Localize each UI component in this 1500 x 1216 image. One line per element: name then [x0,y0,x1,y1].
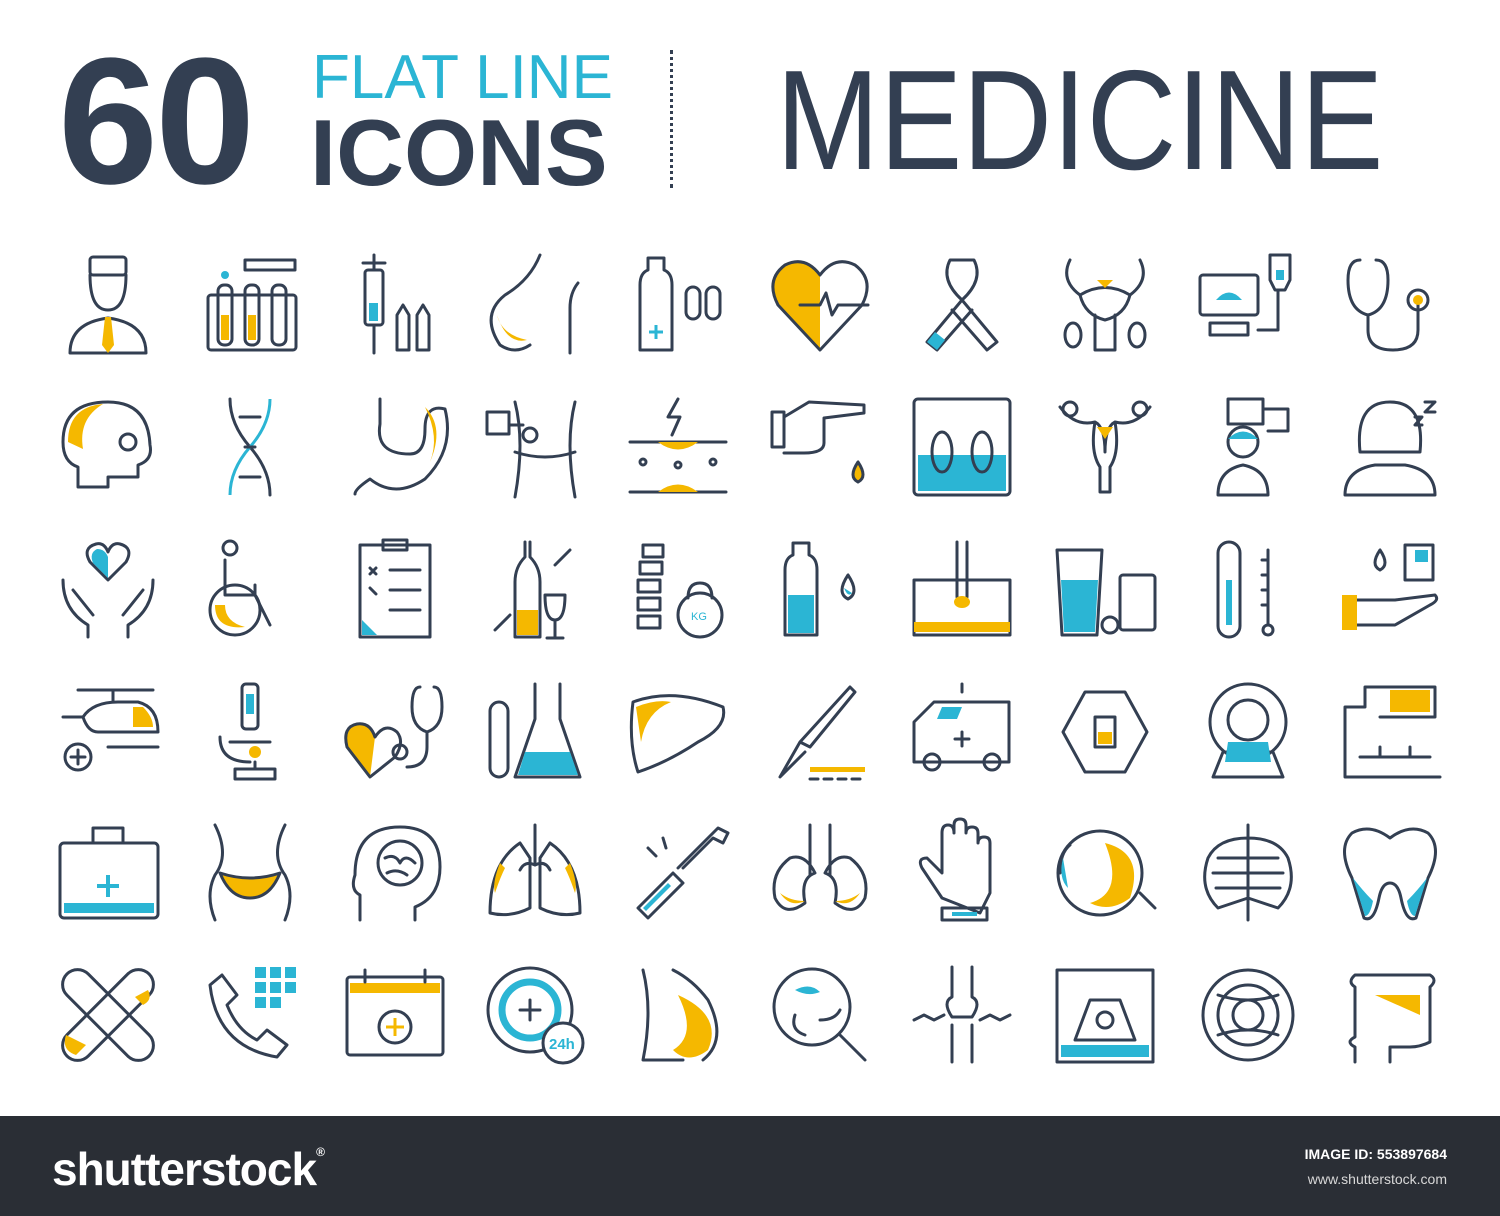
icon: ribcage [1205,825,1291,920]
icon: bottle pills [640,258,720,350]
icon: kidneys [774,825,866,909]
icon: ultrasound image [1057,970,1153,1062]
icon: breast [491,255,578,353]
icon: bandage [56,963,160,1067]
icon: dna [230,399,270,495]
icon: ribbon [927,260,997,350]
icon: 24h: 24h [549,1036,575,1053]
icon: knee joint [914,967,1010,1062]
icon: doctor [70,257,146,353]
icon: skin lightning [630,399,726,492]
icon: skull [63,402,150,487]
icon: wine [495,542,570,638]
icon: clipboard [360,540,430,637]
icon: heart stethoscope [346,687,442,777]
icon: colon [1350,975,1434,1062]
icon: belly [643,970,717,1060]
icon: ultrasound [1200,255,1290,335]
icon: molecule [1063,692,1147,772]
icon: thermometer [1218,542,1273,637]
icon: hands heart [63,544,153,637]
icon: head brain [353,827,440,920]
icon: stethoscope [1348,260,1428,350]
icon: hand drop IV [1342,545,1437,630]
icon: mri [1210,684,1286,777]
icon: test tubes [208,260,296,350]
icon: male organs [1065,260,1145,350]
icon: microscope [220,684,275,779]
dotted divider [670,50,673,188]
icon: eye [1058,831,1155,915]
icon: magnifier bacteria [774,969,865,1060]
icon: syringe [363,255,429,353]
icon: broken bone [638,828,728,918]
icon: wheelchair [210,541,270,635]
icon: hair follicle [914,542,1010,635]
footer: url: www.shutterstock.com [1308,1171,1447,1187]
icon: tooth [1344,829,1436,919]
icon: finger blood [772,402,864,482]
title: medicine: MEDICINE [776,41,1383,200]
footer: image id: IMAGE ID: 553897684 [1305,1146,1447,1162]
icon: 24h [488,968,583,1063]
icon: helicopter [63,690,158,770]
icon: lungs [490,825,580,915]
icon: scalpel [780,687,865,779]
icon: water glass pills [1057,550,1155,635]
icon: xray machine [1345,687,1440,777]
icon: first aid kit [60,828,158,918]
icon: spine kettlebell [638,545,722,637]
icon: water bottle [785,543,854,635]
icon: liver [631,696,724,772]
footer: logo: shutterstock® [52,1143,324,1195]
icon: spine kettlebell: KG [691,611,707,623]
icon: waist [210,825,290,920]
icon: ambulance [914,684,1009,770]
title: flat line: FLAT LINE [312,43,613,112]
icon: calendar [347,970,443,1055]
icon: stomach [355,399,448,494]
icon: phone [210,967,296,1057]
title: icons: ICONS [310,100,608,205]
icon: doctor laptop [1218,399,1288,495]
icon: lab flask [490,684,580,777]
icon: heart [773,262,868,350]
footer bar [0,1116,1500,1216]
icon: uterus [1060,402,1150,492]
icon: intestines [1203,970,1293,1060]
icon: insulin pump [487,402,575,497]
title: 60: 60 [58,21,252,222]
icon: scale [914,399,1010,495]
icon: glove [920,819,990,920]
icon: sleeping woman [1345,402,1435,495]
